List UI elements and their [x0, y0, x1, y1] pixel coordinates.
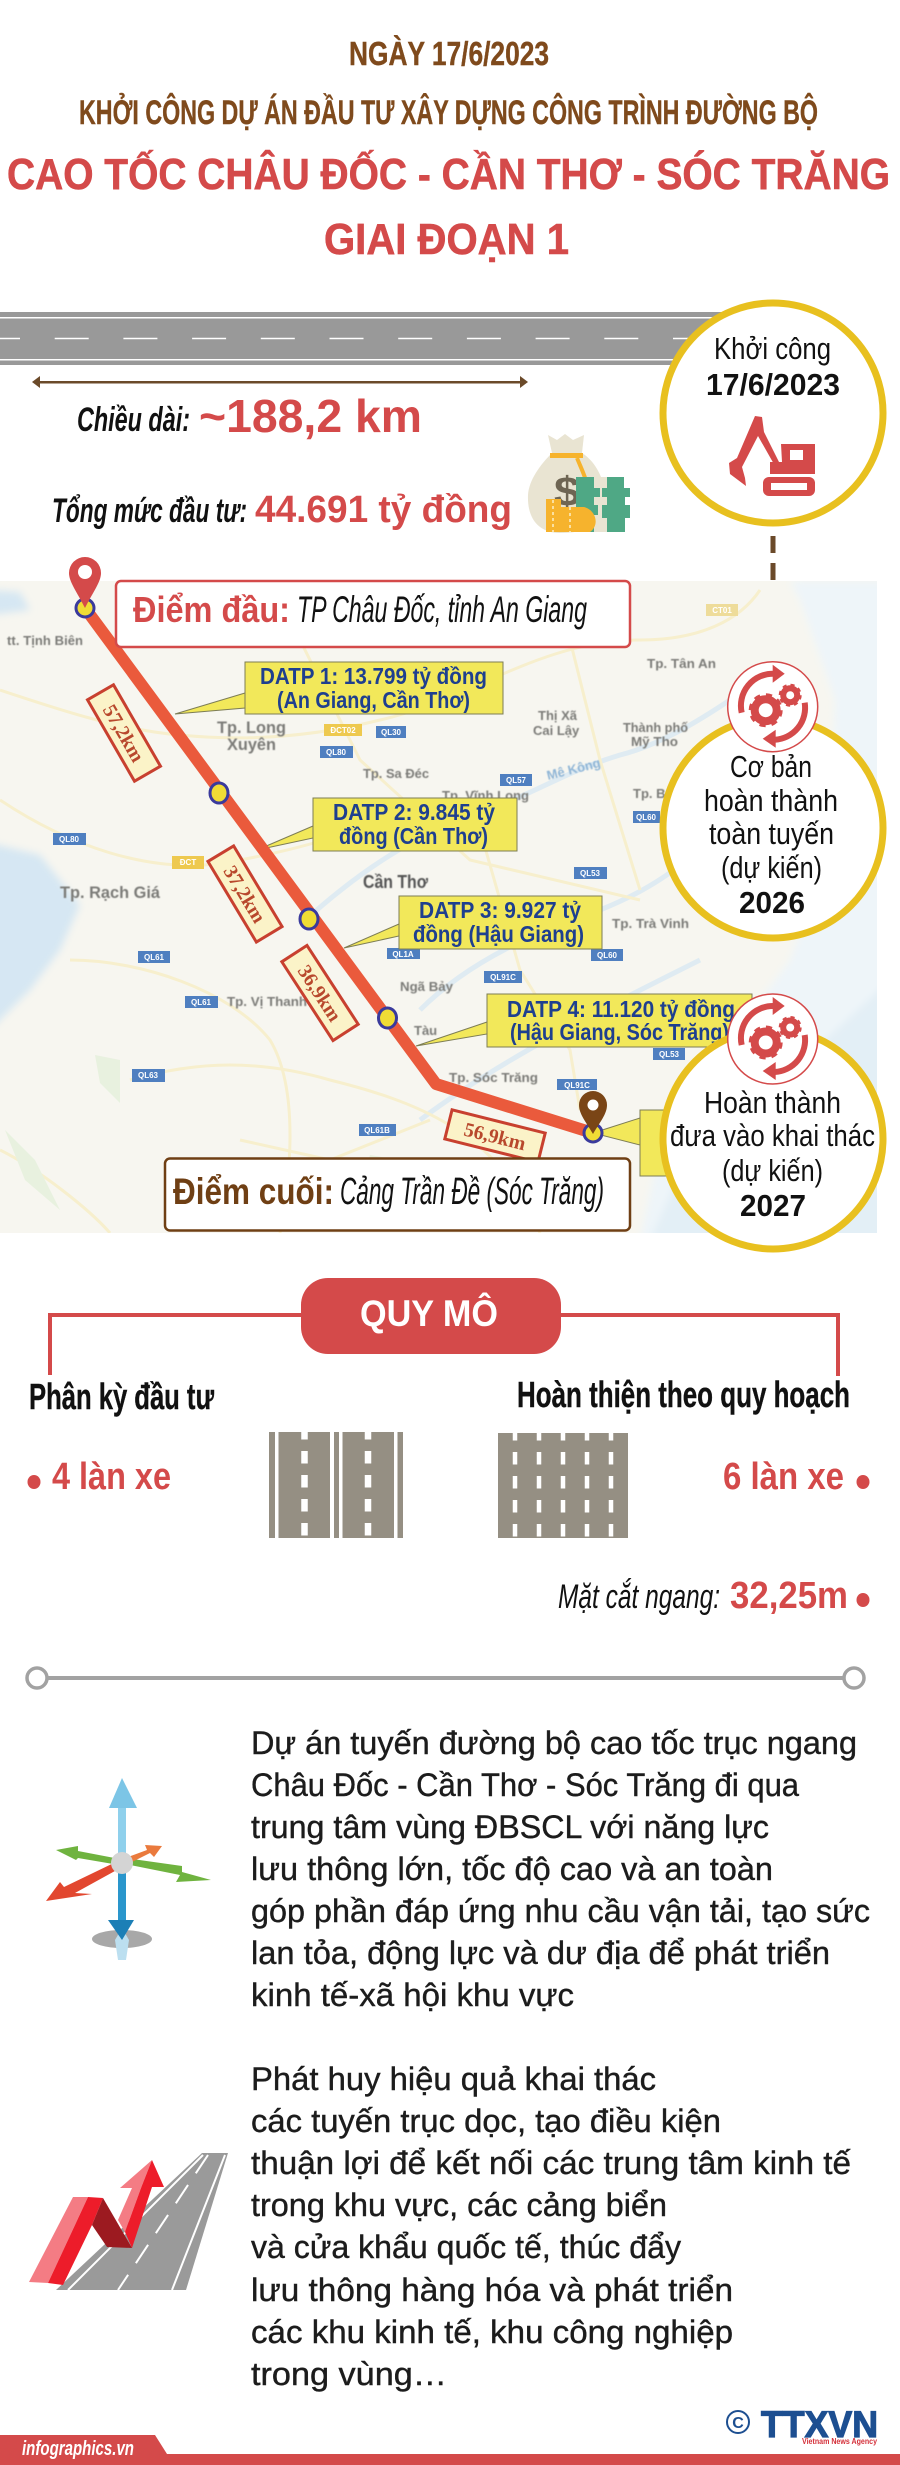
map place labels: Cai Lậy: [533, 723, 580, 738]
divider: [27, 1668, 864, 1688]
icon: 6 lane road: [498, 1428, 628, 1538]
cross-section label: Mặt cắt ngang:: [558, 1578, 720, 1616]
callout: DATP 4: [487, 994, 752, 1047]
text block: project role: Châu Đốc - Cần Thơ - Sóc Trăng đi qua: [251, 1767, 799, 1803]
text block: project role: góp phần đáp ứng nhu cầu vận tải, tạo sức: [251, 1893, 870, 1929]
text block: benefits: trong khu vực, các cảng biển: [251, 2187, 667, 2223]
map place labels: Cần Thơ: [363, 872, 428, 892]
map road tags: QL1A: [392, 950, 414, 959]
map place labels: Tp. Sa Đéc: [363, 766, 429, 781]
callout: DATP 3: [399, 896, 602, 949]
callout: DATP 1: (An Giang, Cần Thơ): [277, 687, 470, 713]
column heading: phase: Phân kỳ đầu tư: [29, 1376, 215, 1417]
footer bar: infographics.vn: [22, 2438, 134, 2460]
map place labels: Tp. Rạch Giá: [60, 883, 161, 902]
panel: route map: [0, 557, 890, 1240]
map place labels: Tp. Long: [217, 718, 286, 737]
map place labels: Tp. Sóc Trăng: [449, 1070, 538, 1085]
map road tags: QL53: [580, 869, 601, 878]
map road tags: QL60: [636, 813, 657, 822]
map road tags: QL30: [381, 728, 402, 737]
distance label 37,2km: [208, 846, 282, 942]
map place labels: Tp. Tân An: [647, 656, 716, 671]
map place labels: Thị Xã: [538, 708, 578, 723]
map road tags: QL61: [144, 953, 165, 962]
text block: project role: Dự án tuyến đường bộ cao tốc trục ngang: [251, 1725, 857, 1761]
map road tags: QL53: [659, 1050, 680, 1059]
milestone: 2026: (dự kiến): [721, 850, 822, 885]
start pin: [69, 557, 101, 608]
map road tags: ĐCT: [180, 858, 196, 867]
text block: project role: lan tỏa, động lực và dư địa để phát triển: [251, 1935, 830, 1971]
route line: [85, 608, 593, 1133]
timeline connector: [770, 536, 776, 1000]
icon: road with rising arrow: [29, 2153, 228, 2290]
text block: project role: kinh tế-xã hội khu vực: [251, 1977, 574, 2013]
6 lanes label: 6 làn xe: [723, 1456, 844, 1498]
map road tags: QL91C: [490, 973, 516, 982]
map road tags: QL80: [326, 748, 347, 757]
milestone: 2027: (dự kiến): [722, 1153, 823, 1188]
map road tags: QL61B: [364, 1126, 390, 1135]
icon: money bag: $: [554, 468, 580, 515]
start point box: TP Châu Đốc, tỉnh An Giang: [297, 589, 587, 630]
map road tags: ĐCT02: [330, 726, 356, 735]
icon: gears 2026: [728, 662, 818, 752]
map place labels: Xuyên: [227, 735, 276, 754]
map road tags: QL63: [138, 1071, 159, 1080]
date heading: NGÀY 17/6/2023: [349, 35, 549, 72]
callout: DATP 3: đồng (Hậu Giang): [413, 921, 584, 947]
start point box: Điểm đầu:: [133, 589, 290, 630]
icon: gears 2027: [728, 994, 818, 1084]
map place labels: Mỹ Tho: [631, 734, 678, 749]
icon: excavator: [729, 416, 815, 496]
text block: benefits: Phát huy hiệu quả khai thác: [251, 2061, 656, 2097]
milestone: groundbreaking: [663, 303, 883, 523]
end pin: [579, 1091, 607, 1134]
callout: DATP 3: DATP 3: 9.927 tỷ: [419, 897, 581, 923]
map road tags: QL80: [59, 835, 80, 844]
heading: QUY MÔ: QUY MÔ: [360, 1292, 498, 1334]
milestone: 2026: Cơ bản: [730, 749, 812, 784]
callout: DATP 2: đồng (Cần Thơ): [339, 823, 488, 849]
text block: benefits: và cửa khẩu quốc tế, thúc đẩy: [251, 2229, 681, 2265]
map road tags: CT01: [712, 606, 732, 615]
map road tags: QL57: [506, 776, 527, 785]
distance label 56,9km: 56,9km: [462, 1119, 528, 1155]
cross-section label: [558, 1575, 870, 1617]
footer bar: [0, 2435, 900, 2465]
text block: benefits: các tuyến trục dọc, tạo điều kiện: [251, 2103, 721, 2139]
investment label: Tổng mức đầu tư:: [52, 492, 247, 530]
icon: 4 lane road: [269, 1427, 403, 1538]
investment label: 44.691 tỷ đồng: [255, 489, 512, 531]
text block: benefits: các khu kinh tế, khu công nghiệp: [251, 2314, 733, 2350]
milestone: 2026: 2026: [739, 885, 805, 920]
text block: benefits: thuận lợi để kết nối các trung tâm kinh tế: [251, 2145, 851, 2181]
map place labels: Mê Kông: [545, 755, 602, 783]
distance label 36,9km: 36,9km: [293, 961, 346, 1026]
main title line 2: GIAI ĐOẠN 1: [324, 215, 569, 264]
map road tags: QL61: [191, 998, 212, 1007]
length label: Chiều dài:: [77, 401, 190, 439]
milestone: 2027: 2027: [740, 1188, 806, 1223]
callout pointer shapes: [175, 693, 640, 1145]
milestone: groundbreaking: Khởi công: [714, 331, 831, 366]
map road tags: [53, 604, 738, 1136]
logo: TTXVN: C: [732, 2415, 744, 2432]
callout: DATP 1: [245, 662, 503, 714]
logo: TTXVN: TTXVN: [761, 2404, 878, 2445]
cross-section label: 32,25m: [730, 1575, 848, 1617]
milestone: groundbreaking: 17/6/2023: [706, 367, 840, 402]
map place labels: Tp. B: [633, 786, 666, 801]
route nodes: [76, 599, 602, 1142]
length arrow: [32, 376, 528, 388]
milestone: 2026: toàn tuyến: [709, 816, 834, 851]
callout: DATP 4: DATP 4: 11.120 tỷ đồng: [507, 996, 735, 1022]
map place labels: Ngã Bảy: [400, 979, 454, 994]
heading: QUY MÔ: [301, 1278, 561, 1354]
callout: end port box: [640, 1110, 710, 1176]
text block: benefits: trong vùng…: [251, 2356, 447, 2392]
scale section bracket: [50, 1315, 838, 1376]
length label: [77, 390, 422, 442]
text block: benefits: [251, 2061, 851, 2392]
callout: DATP 4: (Hậu Giang, Sóc Trăng): [510, 1019, 729, 1045]
distance label 37,2km: 37,2km: [219, 862, 270, 927]
map place labels: Tp. Trà Vinh: [612, 916, 689, 931]
title block: [7, 35, 890, 264]
investment label: [52, 489, 512, 531]
map place labels: Tp. Vị Thanh: [227, 994, 307, 1009]
map road tags: QL60: [597, 951, 618, 960]
milestone: 2027: Hoàn thành: [704, 1085, 841, 1120]
milestone: 2026: [663, 718, 883, 938]
text block: project role: lưu thông lớn, tốc độ cao và an toàn: [251, 1851, 773, 1887]
icon: directional arrows: [46, 1778, 211, 1960]
map road tags: QL91C: [564, 1081, 590, 1090]
map place labels: Tàu: [414, 1023, 437, 1038]
end point box: Điểm cuối:: [173, 1171, 334, 1212]
start point box: [116, 581, 630, 647]
callout: DATP 2: DATP 2: 9.845 tỷ: [333, 799, 495, 825]
end point box: Cảng Trần Đề (Sóc Trăng): [340, 1171, 604, 1213]
end point box: [165, 1158, 630, 1230]
text block: project role: [251, 1725, 870, 2013]
callout: DATP 2: [313, 798, 517, 851]
distance label 57,2km: 57,2km: [98, 701, 149, 766]
milestone: 2027: [663, 1029, 883, 1249]
road banner: [0, 312, 730, 365]
distance label 36,9km: [282, 945, 358, 1041]
4 lanes label: 4 làn xe: [52, 1456, 171, 1498]
distance label 56,9km: [445, 1110, 545, 1162]
logo: TTXVN: Vietnam News Agency: [802, 2437, 877, 2446]
map place labels: [7, 633, 716, 1085]
map place labels: tt. Tịnh Biên: [7, 633, 83, 648]
map place labels: Tp. Vĩnh Long: [442, 788, 529, 803]
distance label 57,2km: [88, 685, 160, 781]
text block: project role: trung tâm vùng ĐBSCL với năng lực: [251, 1809, 769, 1845]
map place labels: Thành phố: [623, 720, 688, 735]
text block: benefits: lưu thông hàng hóa và phát triển: [251, 2272, 733, 2308]
callout: DATP 1: DATP 1: 13.799 tỷ đồng: [260, 663, 487, 689]
milestone: 2026: hoàn thành: [704, 783, 838, 818]
length label: ~188,2 km: [199, 390, 422, 442]
map base: [0, 581, 890, 1240]
icon: money bag: [528, 434, 630, 533]
